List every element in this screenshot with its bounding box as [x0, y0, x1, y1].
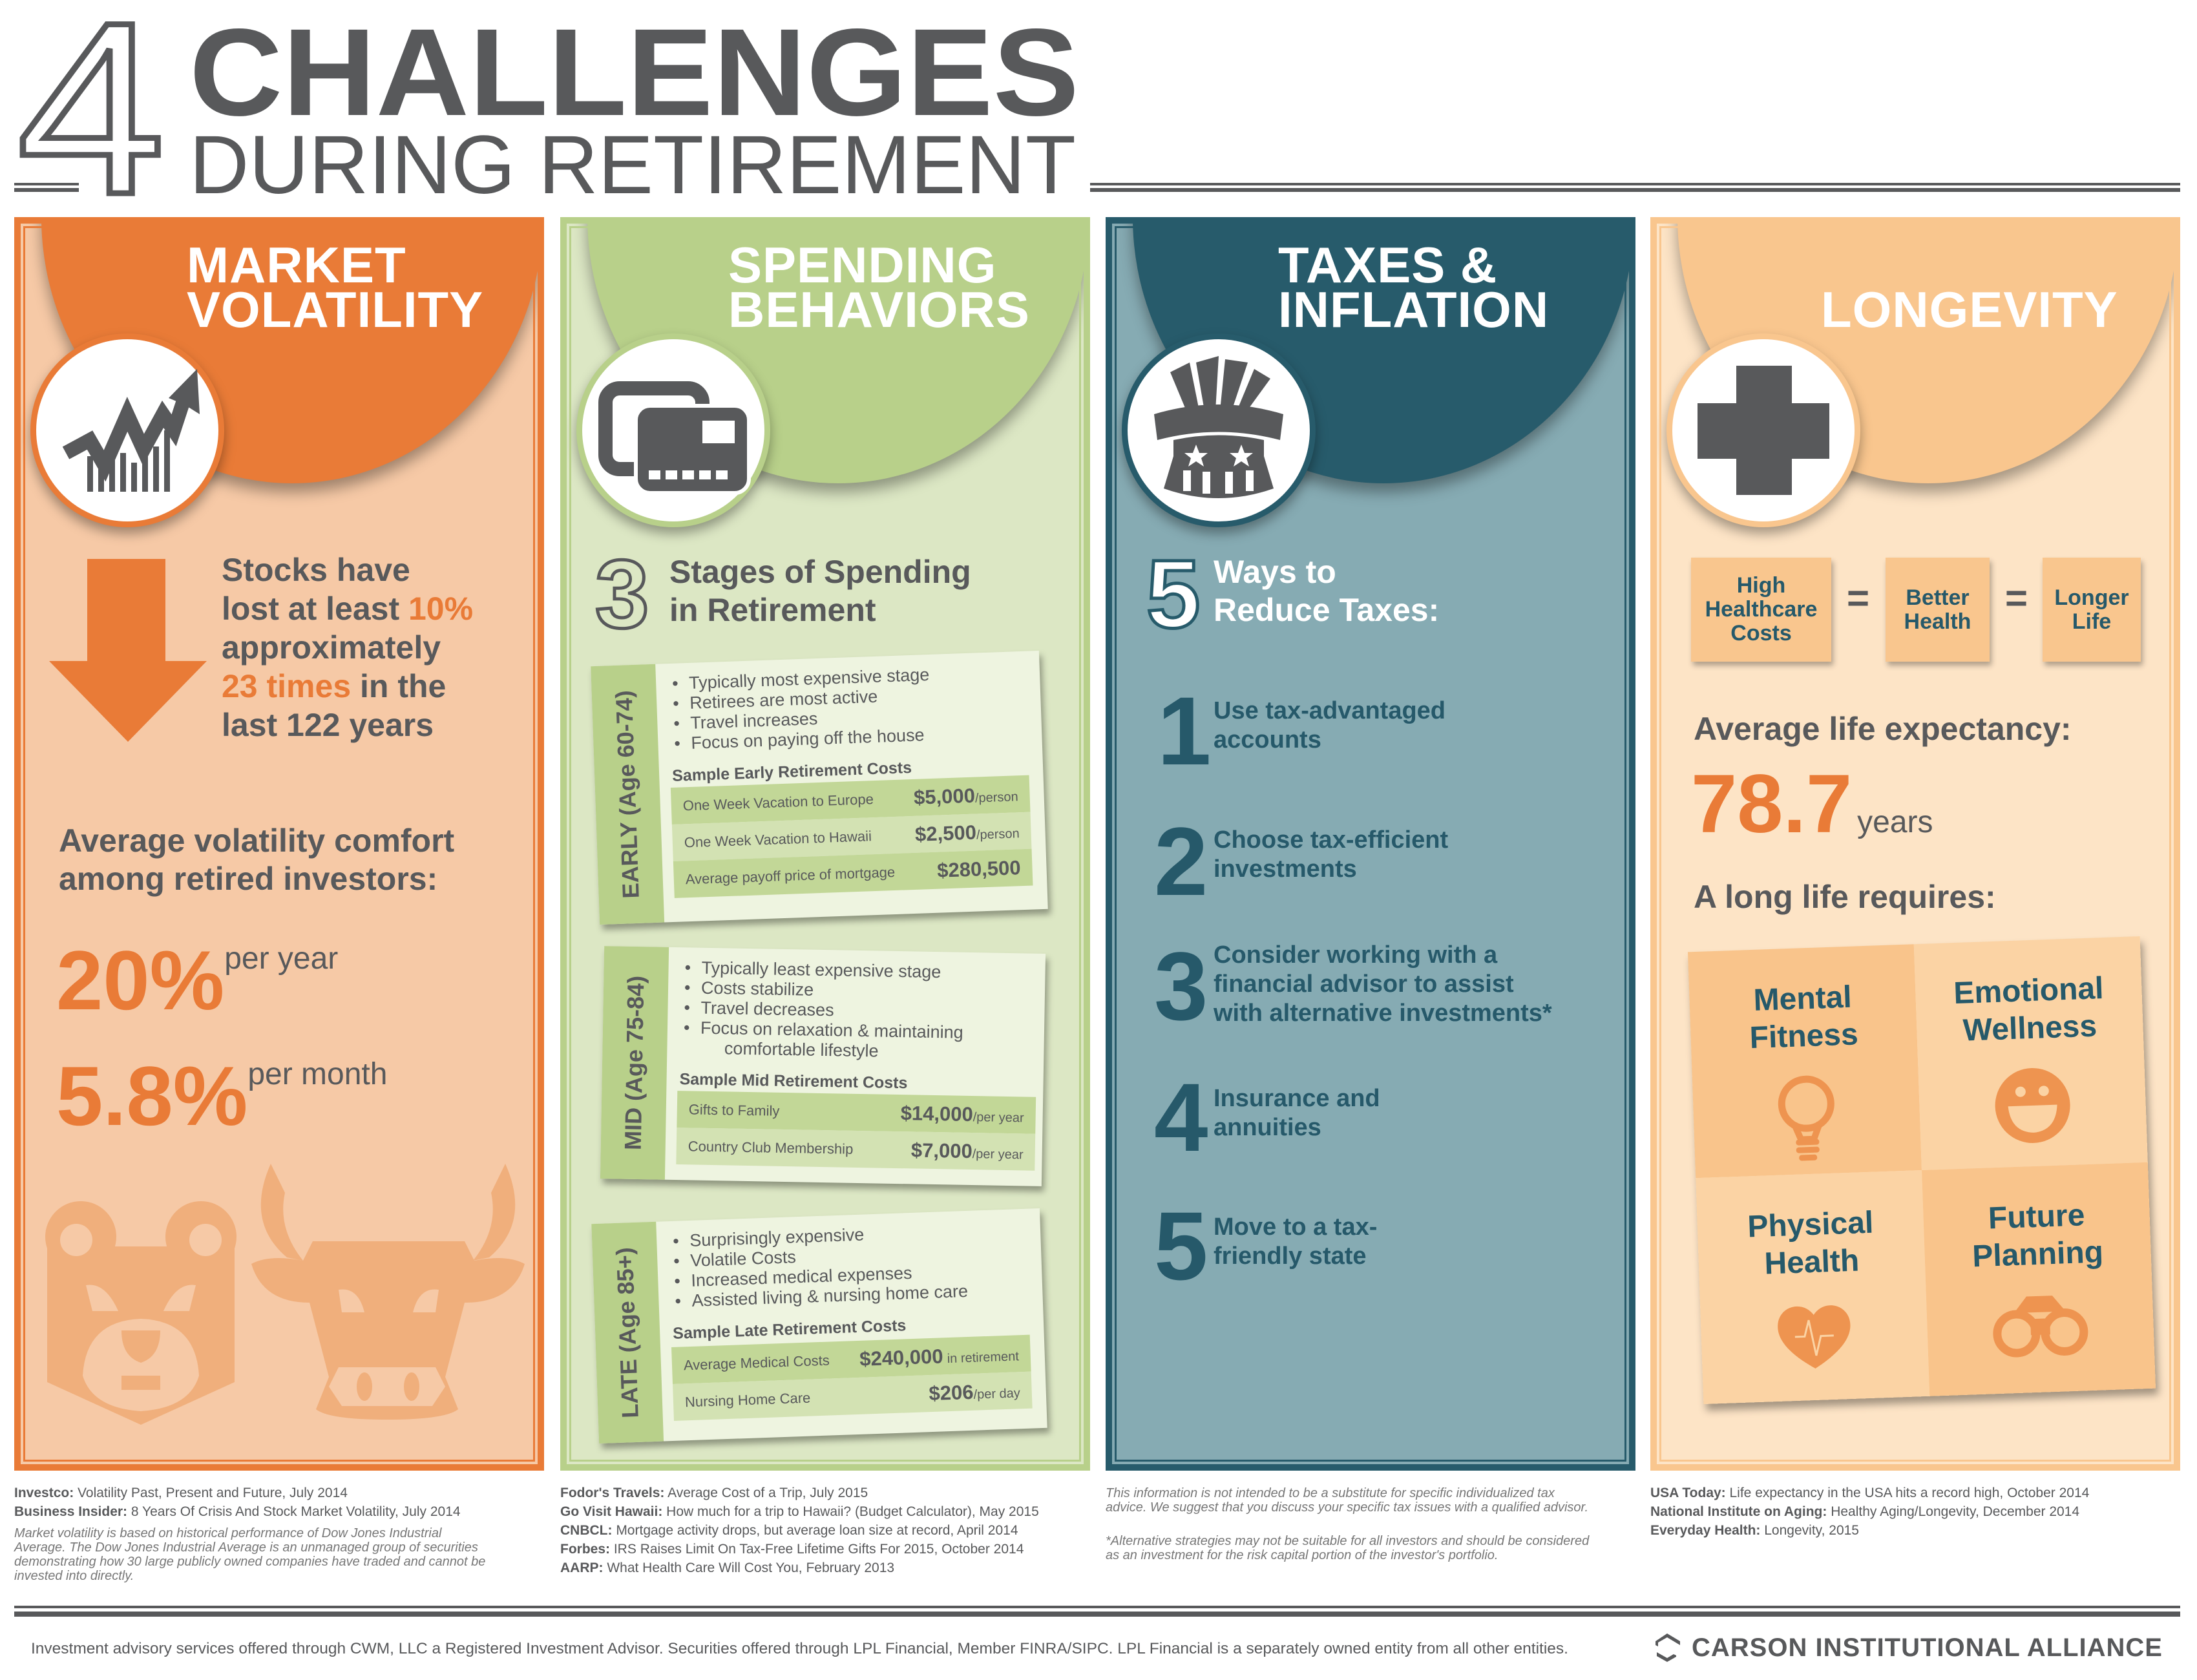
- card: mid stage: [600, 946, 1046, 1186]
- text: stocks stat: Stocks have: [222, 552, 410, 588]
- equation boxes: Health: [1904, 609, 1971, 633]
- item 2: investments: [1214, 856, 1357, 883]
- text: life expectancy: Average life expectancy:: [1694, 711, 2072, 747]
- panel: longevity: [1650, 217, 2180, 1471]
- text: long life requires: A long life requires:: [1694, 879, 1996, 915]
- cell: emotional wellness: Wellness: [1962, 1009, 2097, 1048]
- cell: mental fitness: [1688, 944, 1922, 1178]
- card: early stage: Focus on paying off the house: [691, 725, 925, 753]
- card: early stage: [591, 651, 1048, 925]
- heading: taxes & inflation: TAXES &: [1278, 236, 1497, 293]
- heading: spending behaviors: [728, 236, 1030, 338]
- sources: spending: [560, 1486, 1039, 1575]
- cell: physical health: Health: [1764, 1243, 1860, 1281]
- item 2: 2: [1154, 807, 1208, 916]
- item 1: 1: [1157, 677, 1211, 785]
- stat: 78.7 years: 78.7years: [1691, 758, 1933, 850]
- item 1: Use tax-advantaged: [1214, 697, 1445, 724]
- cell: physical health: [1696, 1170, 1929, 1404]
- header shape: [1677, 0, 2179, 483]
- text: volatility comfort: Average volatility comfort: [59, 823, 454, 859]
- header shape: [1133, 0, 1634, 483]
- item 2: Choose tax-efficient: [1214, 826, 1448, 854]
- sources: longevity: Everyday Health: Longevity, 2015: [1650, 1523, 1859, 1538]
- sources: market volatility: invested into directly.: [14, 1569, 134, 1583]
- card: mid stage: Country Club Membership: [688, 1138, 854, 1157]
- card: early stage: One Week Vacation to Hawaii: [684, 828, 872, 850]
- sources: market volatility: [14, 1486, 485, 1583]
- card: mid stage: $14,000/per year: [900, 1102, 1024, 1126]
- item 4: 4: [1154, 1063, 1208, 1171]
- heading: 3 stages: 3: [595, 540, 649, 648]
- card: late stage: $240,000 in retirement: [859, 1345, 1019, 1370]
- card: late stage: Nursing Home Care: [685, 1389, 811, 1410]
- sources: spending: AARP: What Health Care Will Cost You, February 2013: [560, 1560, 894, 1575]
- card: late stage: [591, 1208, 1047, 1444]
- item 4: [1154, 1063, 1380, 1171]
- card: late stage: Sample Late Retirement Costs: [673, 1316, 907, 1343]
- item 1: accounts: [1214, 726, 1321, 753]
- title line 1: CHALLENGES: [189, 3, 1079, 142]
- card: mid stage: Typically least expensive stage: [701, 958, 941, 982]
- sources: market volatility: Market volatility is based on historical performance of Dow Jones Industrial: [14, 1526, 441, 1540]
- item 1: [1157, 677, 1445, 785]
- heading: spending behaviors: BEHAVIORS: [728, 281, 1030, 338]
- sources: market volatility: Investco: Volatility Past, Present and Future, July 2014: [14, 1486, 348, 1500]
- text: stocks stat: lost at least 10%: [222, 591, 473, 627]
- card: late stage: Assisted living & nursing home care: [691, 1281, 968, 1310]
- card: mid stage: Costs stabilize: [701, 978, 814, 1000]
- heading: taxes & inflation: [1278, 236, 1549, 338]
- heading: 3 stages: in Retirement: [669, 592, 876, 628]
- stat: 20% per year: 20%per year: [56, 933, 338, 1027]
- heading: taxes & inflation: INFLATION: [1278, 281, 1549, 338]
- stat: 5.8% per month: 5.8%per month: [56, 1049, 387, 1143]
- equation boxes: Life: [2072, 609, 2111, 633]
- card: late stage: Average Medical Costs: [684, 1352, 830, 1373]
- card: early stage: Retirees are most active: [689, 687, 878, 713]
- heading: 3 stages: [595, 540, 971, 648]
- text: stocks stat: 23 times in the: [222, 668, 446, 704]
- equation boxes: Better: [1906, 585, 1970, 610]
- card: late stage: Surprisingly expensive: [689, 1225, 865, 1250]
- card: late stage: $206/per day: [929, 1380, 1020, 1405]
- title: [14, 0, 2180, 200]
- item 3: with alternative investments*: [1214, 1000, 1552, 1027]
- card: mid stage: $7,000/per year: [911, 1139, 1024, 1162]
- equation boxes: High: [1737, 573, 1785, 598]
- sources: taxes disclaimer: advice. We suggest that you discuss your specific tax issues with a qualified advisor.: [1106, 1500, 1588, 1515]
- panel: taxes & inflation: [1106, 217, 1635, 1471]
- panel: market volatility: [14, 217, 544, 1471]
- item 3: Consider working with a: [1214, 941, 1497, 969]
- heading: 3 stages: Stages of Spending: [669, 554, 971, 590]
- text: stocks stat: [222, 552, 473, 743]
- equation boxes: =: [1847, 576, 1869, 620]
- grid: four requirements: [1688, 936, 2156, 1404]
- card: early stage: $280,500: [937, 856, 1021, 881]
- logo: carson institutional alliance: CARSON INSTITUTIONAL ALLIANCE: [1692, 1633, 2163, 1662]
- equation boxes: Longer: [2054, 585, 2129, 610]
- item 3: [1154, 932, 1552, 1040]
- sources: taxes disclaimer: *Alternative strategies may not be suitable for all investors and should be considered: [1106, 1534, 1589, 1548]
- sources: longevity: [1650, 1486, 2089, 1538]
- item 4: annuities: [1214, 1114, 1321, 1141]
- item 2: [1154, 807, 1448, 916]
- sources: taxes disclaimer: as an investment for the risk capital portion of the investor's portfolio.: [1106, 1548, 1498, 1562]
- sources: spending: CNBCL: Mortgage activity drops, but average loan size at record, April 2014: [560, 1523, 1018, 1538]
- header shape: [41, 0, 543, 483]
- sources: taxes disclaimer: [1106, 1486, 1590, 1562]
- card: late stage: LATE (Age 85+): [611, 1247, 644, 1418]
- item 5: [1154, 1192, 1377, 1300]
- card: mid stage: Travel decreases: [700, 998, 834, 1020]
- sources: taxes disclaimer: This information is not intended to be a substitute for specific individualized tax: [1106, 1486, 1555, 1500]
- equation boxes: =: [2005, 576, 2028, 620]
- cell: mental fitness: Mental: [1753, 980, 1853, 1018]
- icon: rising chart: [30, 333, 224, 527]
- item 5: Move to a tax-: [1214, 1213, 1377, 1241]
- card: mid stage: Sample Mid Retirement Costs: [679, 1070, 908, 1092]
- card: early stage: One Week Vacation to Europe: [682, 791, 874, 814]
- sources: longevity: National Institute on Aging: Healthy Aging/Longevity, December 2014: [1650, 1504, 2079, 1519]
- sources: spending: Fodor's Travels: Average Cost of a Trip, July 2015: [560, 1486, 868, 1500]
- sources: market volatility: Average. The Dow Jones Industrial Average is an unmanaged group of securities: [14, 1540, 478, 1555]
- card: early stage: Travel increases: [690, 709, 818, 733]
- card: early stage: Typically most expensive stage: [689, 665, 930, 693]
- text: stocks stat: approximately: [222, 629, 441, 666]
- card: mid stage: Gifts to Family: [689, 1101, 780, 1118]
- item 5: 5: [1154, 1192, 1208, 1300]
- card: late stage: Increased medical expenses: [691, 1263, 912, 1290]
- cell: future planning: Planning: [1971, 1235, 2104, 1274]
- cell: future planning: [1922, 1162, 2156, 1396]
- card: early stage: $5,000/person: [913, 784, 1018, 808]
- item 3: financial advisor to assist: [1214, 971, 1514, 998]
- card: mid stage: MID (Age 75-84): [620, 976, 649, 1150]
- text: volatility comfort: [59, 823, 454, 897]
- heading: market volatility: VOLATILITY: [187, 281, 483, 338]
- heading: 5 ways: [1146, 540, 1439, 648]
- cell: physical health: Physical: [1747, 1206, 1874, 1244]
- item 4: Insurance and: [1214, 1085, 1380, 1112]
- footer disclaimer: Investment advisory services offered through CWM, LLC a Registered Investment Advisor. Securities offered through LPL Financial, Member FINRA/SIPC. LPL Financial is a separately owned entity from all other entities.: [31, 1640, 1568, 1657]
- equation boxes: Costs: [1730, 621, 1792, 646]
- icon: credit cards: [576, 333, 770, 527]
- header shape: [587, 0, 1089, 483]
- heading: market volatility: [187, 236, 483, 338]
- item 3: 3: [1154, 932, 1208, 1040]
- heading: 5 ways: Ways to: [1214, 554, 1336, 590]
- sources: market volatility: Business Insider: 8 Years Of Crisis And Stock Market Volatility, July 2014: [14, 1504, 461, 1519]
- card: late stage: Volatile Costs: [690, 1247, 796, 1270]
- icon: medical cross: [1666, 333, 1860, 527]
- heading: spending behaviors: SPENDING: [728, 236, 996, 293]
- card: mid stage: comfortable lifestyle: [724, 1038, 879, 1060]
- cell: emotional wellness: Emotional: [1953, 971, 2104, 1011]
- cell: emotional wellness: [1914, 936, 2148, 1170]
- heading: 5 ways: Reduce Taxes:: [1214, 592, 1439, 628]
- item 5: friendly state: [1214, 1243, 1367, 1270]
- sources: spending: Forbes: IRS Raises Limit On Tax-Free Lifetime Gifts For 2015, October 2014: [560, 1542, 1024, 1557]
- heading: market volatility: MARKET: [187, 236, 406, 293]
- equation boxes: [1690, 558, 2146, 669]
- heading: 5 ways: 5: [1146, 540, 1200, 648]
- icon: bear: [45, 1201, 237, 1425]
- sources: spending: Go Visit Hawaii: How much for a trip to Hawaii? (Budget Calculator), May 2015: [560, 1504, 1039, 1519]
- sources: longevity: USA Today: Life expectancy in the USA hits a record high, October 2014: [1650, 1486, 2089, 1500]
- text: volatility comfort: among retired investors:: [59, 861, 437, 897]
- panel: spending behaviors: [560, 217, 1090, 1471]
- icon: bull: [251, 1164, 525, 1420]
- equation boxes: Healthcare: [1705, 597, 1817, 622]
- heading: longevity: LONGEVITY: [1821, 281, 2118, 338]
- card: early stage: EARLY (Age 60-74): [611, 690, 644, 899]
- cell: mental fitness: Fitness: [1749, 1017, 1859, 1055]
- sources: market volatility: demonstrating how 30 large publicly owned companies have traded and cannot be: [14, 1555, 485, 1569]
- icon: uncle sam hat: [1122, 333, 1316, 527]
- arrow: down: [49, 559, 207, 742]
- card: early stage: Sample Early Retirement Costs: [672, 759, 912, 785]
- cell: future planning: Future: [1988, 1198, 2085, 1235]
- text: stocks stat: last 122 years: [222, 707, 434, 743]
- card: mid stage: Focus on relaxation & maintaining: [700, 1018, 963, 1042]
- card: early stage: Average payoff price of mortgage: [685, 863, 896, 887]
- card: early stage: $2,500/person: [914, 821, 1020, 845]
